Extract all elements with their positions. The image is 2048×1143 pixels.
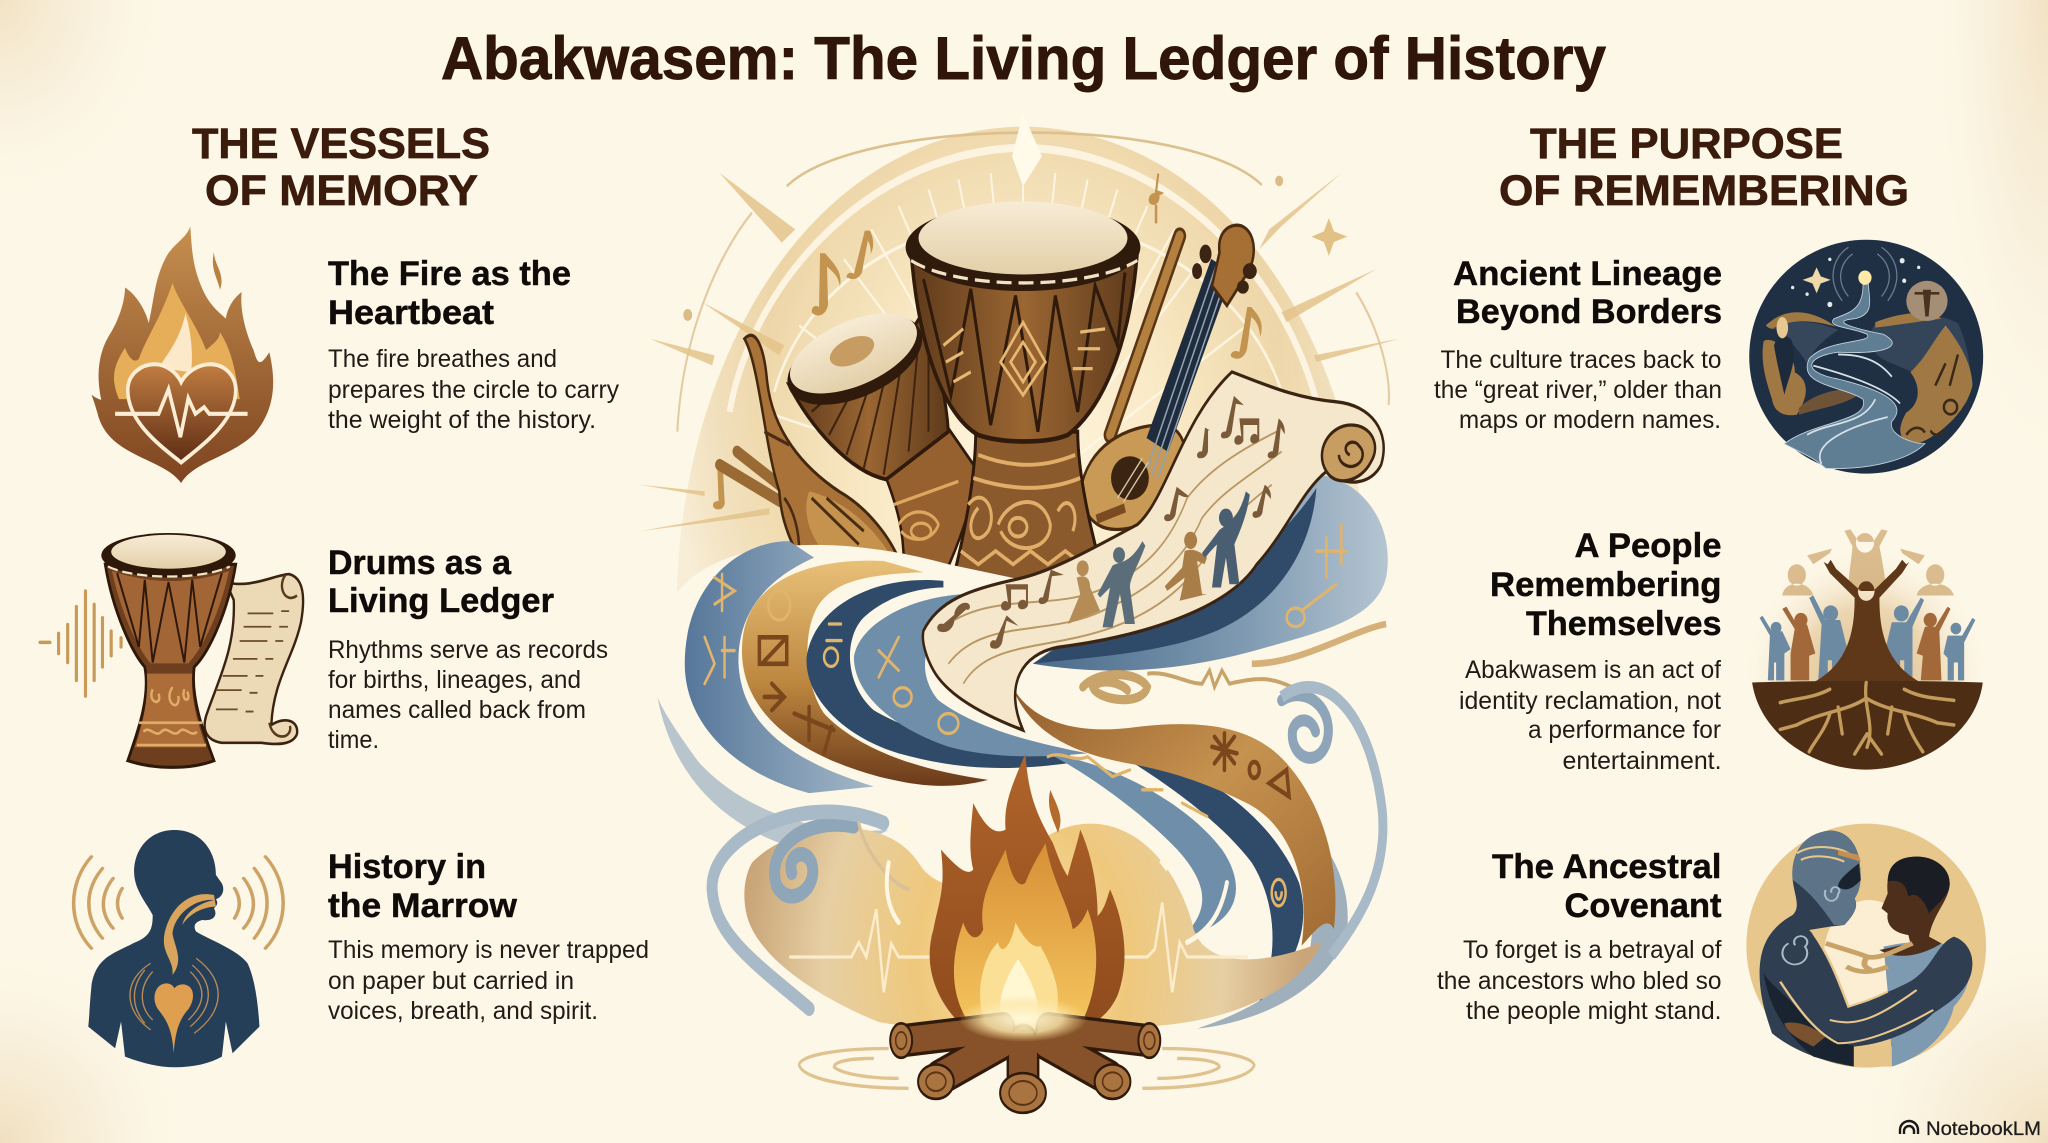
left pale blue wisp (657, 697, 889, 850)
text block: history in the marrow: the Marrow (328, 887, 518, 925)
drumstick and lute (1080, 225, 1257, 529)
NotebookLM brand mark: NotebookLM (1926, 1118, 2041, 1140)
text block: drums as a living ledger: for births, lineages, and (328, 666, 581, 694)
panel: the purpose of remembering (1434, 120, 2041, 1140)
heading: vessels of memory (192, 120, 490, 215)
bonfire flame (930, 753, 1125, 1025)
text block: a people remembering themselves: identity reclamation, not (1459, 687, 1721, 715)
icon: people rooted in tree (1748, 529, 1984, 770)
text block: a people remembering themselves: Abakwasem is an act of (1465, 656, 1721, 684)
gold band (742, 561, 988, 786)
text block: fire as the heartbeat: Heartbeat (328, 294, 494, 332)
horn instrument (720, 335, 901, 568)
central illustration (640, 113, 1399, 1113)
small drum (780, 296, 978, 578)
text block: the ancestral covenant: To forget is a betrayal of (1463, 936, 1722, 964)
text block: drums as a living ledger: Rhythms serve as records (328, 636, 608, 664)
navy band (807, 580, 1070, 768)
heading: purpose of remembering: OF REMEMBERING (1499, 167, 1909, 215)
symbols on bands (705, 525, 1346, 906)
heading: purpose of remembering (1499, 120, 1909, 215)
lower right navy band (1118, 753, 1303, 1002)
heartbeat line (789, 903, 1248, 992)
text block: a people remembering themselves: Remembering (1490, 566, 1722, 604)
text block: the ancestral covenant (1437, 848, 1722, 1025)
upper right navy band (1033, 488, 1316, 664)
text block: the ancestral covenant: the people might stand. (1466, 997, 1722, 1025)
text block: fire as the heartbeat (328, 255, 619, 434)
ripples under fire (799, 1049, 1254, 1088)
panel: the vessels of memory (40, 120, 649, 1067)
swirls and wisps (1083, 624, 1386, 956)
music notes (713, 173, 1262, 509)
text block: drums as a living ledger (328, 544, 608, 754)
heading: vessels of memory: THE VESSELS (192, 120, 490, 168)
icon: great river circle (1749, 240, 1983, 474)
icon: breathing figure (74, 830, 283, 1067)
sparkles near fire (892, 813, 1173, 871)
text block: a people remembering themselves (1459, 527, 1722, 775)
text block: the ancestral covenant: the ancestors who bled so (1437, 967, 1722, 995)
notes on scroll (937, 396, 1285, 649)
text block: a people remembering themselves: entertainment. (1562, 747, 1722, 775)
heading: vessels of memory: OF MEMORY (205, 167, 478, 215)
big drum (906, 201, 1140, 581)
text block: the ancestral covenant: Covenant (1564, 887, 1722, 925)
text block: ancient lineage: The culture traces back to (1440, 346, 1722, 374)
text block: ancient lineage: the “great river,” older than (1434, 376, 1722, 404)
text block: ancient lineage: Ancient Lineage (1453, 255, 1722, 293)
icon: ancestor embracing youth (1746, 824, 1986, 1068)
upper outer blue band (685, 541, 874, 793)
lower right blue band (1048, 753, 1236, 937)
text block: fire as the heartbeat: The fire breathes and (328, 345, 557, 373)
sun disc and rays (640, 126, 1398, 592)
text block: history in the marrow (328, 848, 649, 1025)
icon: drum with scroll (40, 533, 303, 767)
text block: drums as a living ledger: names called back from (328, 696, 586, 724)
text block: the ancestral covenant: The Ancestral (1492, 848, 1722, 886)
text block: ancient lineage: maps or modern names. (1459, 406, 1721, 434)
text block: ancient lineage: Beyond Borders (1456, 293, 1722, 331)
river bands (657, 475, 1388, 1029)
heading: purpose of remembering: THE PURPOSE (1530, 120, 1843, 168)
logs (890, 995, 1160, 1113)
text block: history in the marrow: History in (328, 848, 486, 886)
text block: a people remembering themselves: A People (1574, 527, 1722, 565)
text block: fire as the heartbeat: The Fire as the (328, 255, 571, 293)
parchment scroll (923, 372, 1384, 730)
title: Abakwasem: The Living Ledger of History (441, 25, 1607, 92)
staves on scroll (938, 432, 1282, 684)
text block: drums as a living ledger: Living Ledger (328, 582, 554, 620)
text block: history in the marrow: voices, breath, and spirit. (328, 997, 598, 1025)
text block: fire as the heartbeat: the weight of the history. (328, 406, 596, 434)
upper right blue band (1033, 475, 1388, 671)
text block: fire as the heartbeat: prepares the circle to carry (328, 376, 619, 404)
text block: drums as a living ledger: Drums as a (328, 544, 512, 582)
text block: history in the marrow: on paper but carried in (328, 967, 574, 995)
left spiral (712, 812, 1227, 1009)
icon: fire and heart (91, 226, 273, 483)
text block: history in the marrow: This memory is never trapped (328, 936, 649, 964)
mid blue band (854, 594, 1088, 756)
text block: ancient lineage (1434, 255, 1722, 434)
cream backing behind river (666, 491, 1399, 989)
dancing figures on scroll (1068, 491, 1250, 627)
lower right brown band (1008, 677, 1335, 946)
text block: drums as a living ledger: time. (328, 726, 379, 754)
text block: a people remembering themselves: a performance for (1528, 716, 1721, 744)
text block: a people remembering themselves: Themselves (1526, 605, 1722, 643)
fire glow blob (744, 824, 1321, 1032)
